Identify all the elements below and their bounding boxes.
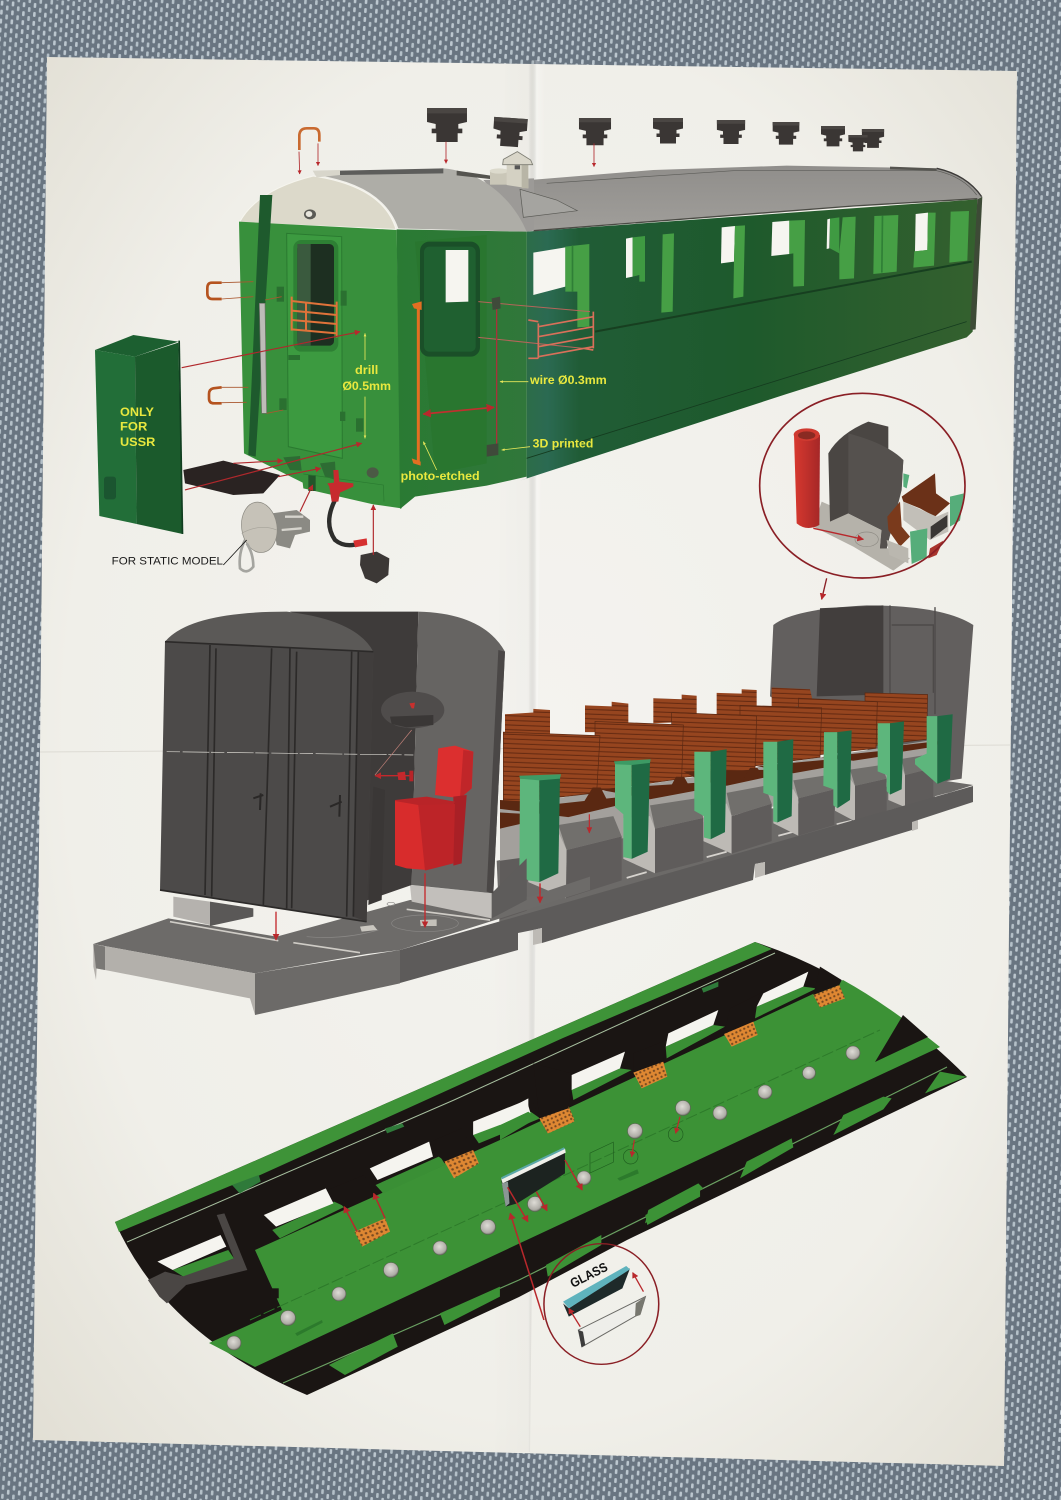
assembly arrows bbox=[182, 142, 594, 555]
door lines bbox=[160, 642, 373, 922]
far mesh baskets bbox=[539, 985, 845, 1133]
rear seat backs bbox=[505, 687, 813, 745]
fittings on front bbox=[277, 287, 363, 432]
cabinet roof bbox=[165, 612, 373, 652]
assembly arrows down bbox=[276, 873, 540, 940]
main roof section behind bbox=[483, 178, 534, 232]
outer lower line bbox=[283, 1067, 947, 1383]
curved end piece bbox=[368, 787, 385, 905]
wall fitting with arrow bbox=[375, 771, 413, 781]
wire handrail with printed clips bbox=[487, 297, 501, 457]
panel: assembled carriage exterior bbox=[95, 108, 982, 583]
yellow callout labels bbox=[342, 363, 607, 483]
lamp glass part on panel bbox=[501, 1147, 566, 1207]
front face bbox=[239, 222, 402, 508]
callout ring bbox=[760, 393, 965, 578]
floor top surface bbox=[497, 779, 973, 936]
green partitions bbox=[519, 714, 953, 882]
cabinet front bbox=[160, 642, 373, 922]
roof ventilators bbox=[427, 108, 884, 151]
lower band green chunks bbox=[329, 1187, 700, 1375]
cream end roof bbox=[239, 176, 396, 229]
static model label: FOR STATIC MODEL bbox=[112, 555, 223, 567]
front door bbox=[287, 233, 342, 458]
panel: toilet compartment near end bbox=[93, 612, 590, 1015]
callout arrow bbox=[813, 528, 863, 539]
yellow callout labels: 3D printed bbox=[533, 437, 593, 451]
small dark fitting bbox=[270, 1288, 279, 1298]
floor round holes bbox=[307, 902, 458, 937]
yellow callout labels: drill bbox=[355, 363, 378, 377]
wall inset detail bbox=[375, 692, 444, 775]
dark marks bbox=[295, 1171, 639, 1336]
seat arrows bbox=[540, 814, 589, 903]
roof chimney bbox=[490, 152, 533, 188]
near floor surface bbox=[93, 877, 590, 973]
static model label bbox=[112, 540, 247, 567]
clear window part bbox=[578, 1297, 645, 1347]
seat pans and pedestals bbox=[500, 741, 938, 829]
block tops bbox=[558, 754, 933, 850]
box label: ONLY bbox=[120, 405, 155, 419]
photo-etched handrail bbox=[412, 301, 422, 466]
yellow callout labels: wire Ø0.3mm bbox=[529, 373, 607, 387]
far lower chunks bbox=[645, 1072, 967, 1223]
carriage long side bbox=[520, 166, 982, 481]
roof bbox=[530, 166, 982, 231]
carriage front end and vestibule bbox=[95, 128, 607, 583]
back wall of compartment bbox=[290, 612, 418, 902]
block supports bbox=[173, 858, 527, 926]
partitions in callout bbox=[903, 473, 964, 564]
panel: carriage floor ceiling view bbox=[115, 942, 967, 1395]
callout ring bbox=[544, 1244, 659, 1364]
seats in callout bbox=[887, 473, 950, 563]
panel arrows bbox=[344, 1160, 582, 1320]
glass label: GLASS bbox=[568, 1259, 610, 1291]
rivet arrows bbox=[632, 1117, 680, 1157]
grey cylinder bbox=[259, 303, 267, 413]
floor white slots bbox=[170, 909, 490, 953]
windows and sills, far half bbox=[500, 967, 967, 1223]
door handles bbox=[253, 793, 342, 817]
box label: USSR bbox=[120, 435, 155, 449]
red air hose bbox=[327, 470, 367, 547]
piers bbox=[328, 1100, 569, 1208]
side wall bbox=[520, 199, 977, 481]
glass detail callout bbox=[544, 1244, 659, 1364]
buffer part bbox=[360, 552, 389, 583]
far bulkhead bbox=[770, 605, 973, 784]
black base bbox=[115, 942, 967, 1395]
electric box only for USSR bbox=[95, 335, 183, 534]
dark block faces bbox=[500, 768, 933, 920]
brackets bbox=[207, 128, 319, 403]
windows and sills, near half bbox=[148, 1100, 700, 1375]
floor long side bbox=[400, 786, 973, 983]
side door bbox=[415, 235, 487, 473]
right wall bbox=[412, 612, 505, 893]
step plate bbox=[183, 461, 280, 495]
under-seat floor fill bbox=[500, 739, 937, 864]
yellow callout labels: Ø0.5mm bbox=[342, 379, 391, 393]
yellow callout labels: photo-etched bbox=[401, 469, 480, 483]
vestibule roof bbox=[313, 168, 527, 232]
floor in callout bbox=[813, 502, 910, 571]
glass pane bbox=[563, 1266, 630, 1317]
bracket guide lines bbox=[222, 282, 283, 413]
light block faces bbox=[527, 768, 905, 898]
front row seat backs bbox=[503, 693, 928, 804]
windows bbox=[533, 211, 969, 327]
window row far bbox=[500, 972, 817, 1140]
mesh baskets bbox=[354, 1107, 575, 1247]
black wedge at far end bbox=[875, 1015, 928, 1062]
near floor corner face bbox=[255, 950, 400, 1015]
roof vent rivets bbox=[227, 1046, 860, 1350]
window row bbox=[264, 1100, 540, 1238]
yellow leader lines bbox=[365, 333, 530, 470]
top green strip bbox=[115, 942, 772, 1232]
near floor front face bbox=[93, 944, 255, 1015]
floor slots bbox=[532, 794, 948, 903]
red toilet unit bbox=[395, 746, 473, 871]
pointer to bulkhead bbox=[822, 578, 827, 599]
panel seams bbox=[250, 1030, 880, 1320]
end window frame bbox=[148, 1213, 247, 1303]
callout arrows bbox=[569, 1273, 643, 1327]
photo-etched grille on door bbox=[292, 297, 337, 337]
red cylinder bbox=[794, 428, 820, 528]
end strip bbox=[970, 197, 982, 330]
side vestibule bbox=[397, 229, 527, 509]
green patches bbox=[232, 1123, 404, 1193]
far green patch bbox=[702, 982, 718, 993]
booth in callout bbox=[828, 422, 903, 548]
far piers bbox=[533, 967, 842, 1118]
side mounted green ladder bbox=[248, 195, 272, 457]
central green panel bbox=[209, 980, 940, 1367]
box label: FOR bbox=[120, 420, 147, 434]
panel: carriage interior, far end and seating bbox=[497, 605, 973, 936]
side grille with guide wires bbox=[478, 302, 593, 358]
static model lamp and coupler bbox=[238, 500, 310, 571]
rivet hole guides bbox=[590, 1127, 683, 1173]
top strip line bbox=[127, 953, 775, 1242]
panel: interior detail callout circle bbox=[760, 393, 965, 599]
box label bbox=[120, 405, 155, 449]
crease bbox=[167, 752, 413, 755]
